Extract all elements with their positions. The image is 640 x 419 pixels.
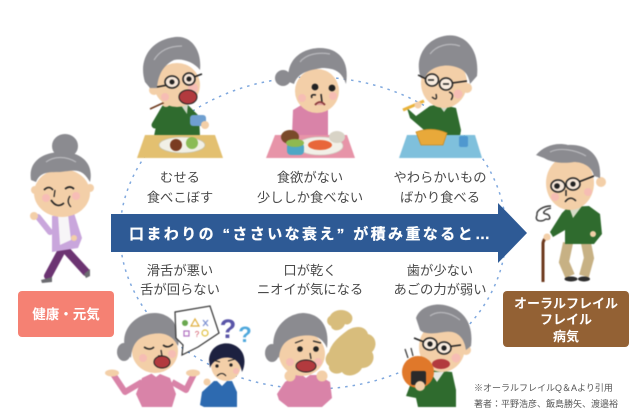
icon: man choking while eating	[137, 37, 223, 158]
main arrow with message: 口まわりの “ささいな衰え” が積み重なると…	[129, 225, 490, 243]
captions above arrow: 食べこぼす	[147, 190, 213, 205]
captions above arrow: やわらかいもの	[393, 170, 487, 185]
icon: question marks	[220, 314, 252, 347]
source note: 著者：平野浩彦、飯島勝矢、渡邉裕	[474, 398, 618, 409]
captions below arrow: あごの力が弱い	[393, 282, 487, 297]
captions below arrow: ニオイが気になる	[257, 282, 363, 297]
label: oral frailty: オーラルフレイル	[514, 296, 618, 311]
icon: speech bubble with symbols: ?	[195, 330, 200, 339]
dashed circle connecting symptoms	[120, 77, 506, 389]
captions below arrow: 歯が少ない	[407, 263, 473, 278]
captions above arrow: 食欲がない	[277, 170, 343, 185]
label: oral frailty: 病気	[553, 329, 579, 344]
icon: woman with unclear speech	[105, 313, 200, 407]
icon: confused boy	[200, 343, 244, 407]
captions below arrow: 口が乾く	[283, 263, 337, 278]
label: healthy: 健康・元気	[32, 306, 100, 322]
icon: speech bubble with symbols	[175, 306, 219, 355]
icon: woman with dry mouth and odor cloud	[265, 310, 375, 407]
captions below arrow: 舌が回らない	[140, 282, 220, 297]
captions above arrow: 少ししか食べない	[257, 190, 363, 205]
icon: man with weak jaw biting rice ball	[402, 304, 471, 407]
icon: man eating only soft food	[399, 35, 482, 158]
icon: question marks: ?	[220, 314, 236, 344]
label: oral frailty	[503, 291, 629, 347]
captions above arrow: ばかり食べる	[400, 190, 480, 205]
label: healthy	[18, 291, 114, 337]
icon: woman with no appetite	[266, 48, 355, 158]
label: oral frailty: フレイル	[540, 312, 592, 327]
captions below arrow	[140, 263, 487, 297]
captions above arrow: むせる	[160, 170, 200, 185]
icon: healthy grandmother walking	[30, 134, 94, 283]
icon: question marks: ?	[238, 322, 252, 347]
source note: ※オーラルフレイルQ＆Aより引用	[474, 383, 613, 393]
icon: frail man with cane	[536, 144, 606, 282]
captions above arrow	[147, 170, 487, 205]
captions below arrow: 滑舌が悪い	[147, 263, 213, 278]
source note	[474, 383, 618, 409]
main arrow with message	[111, 203, 527, 263]
